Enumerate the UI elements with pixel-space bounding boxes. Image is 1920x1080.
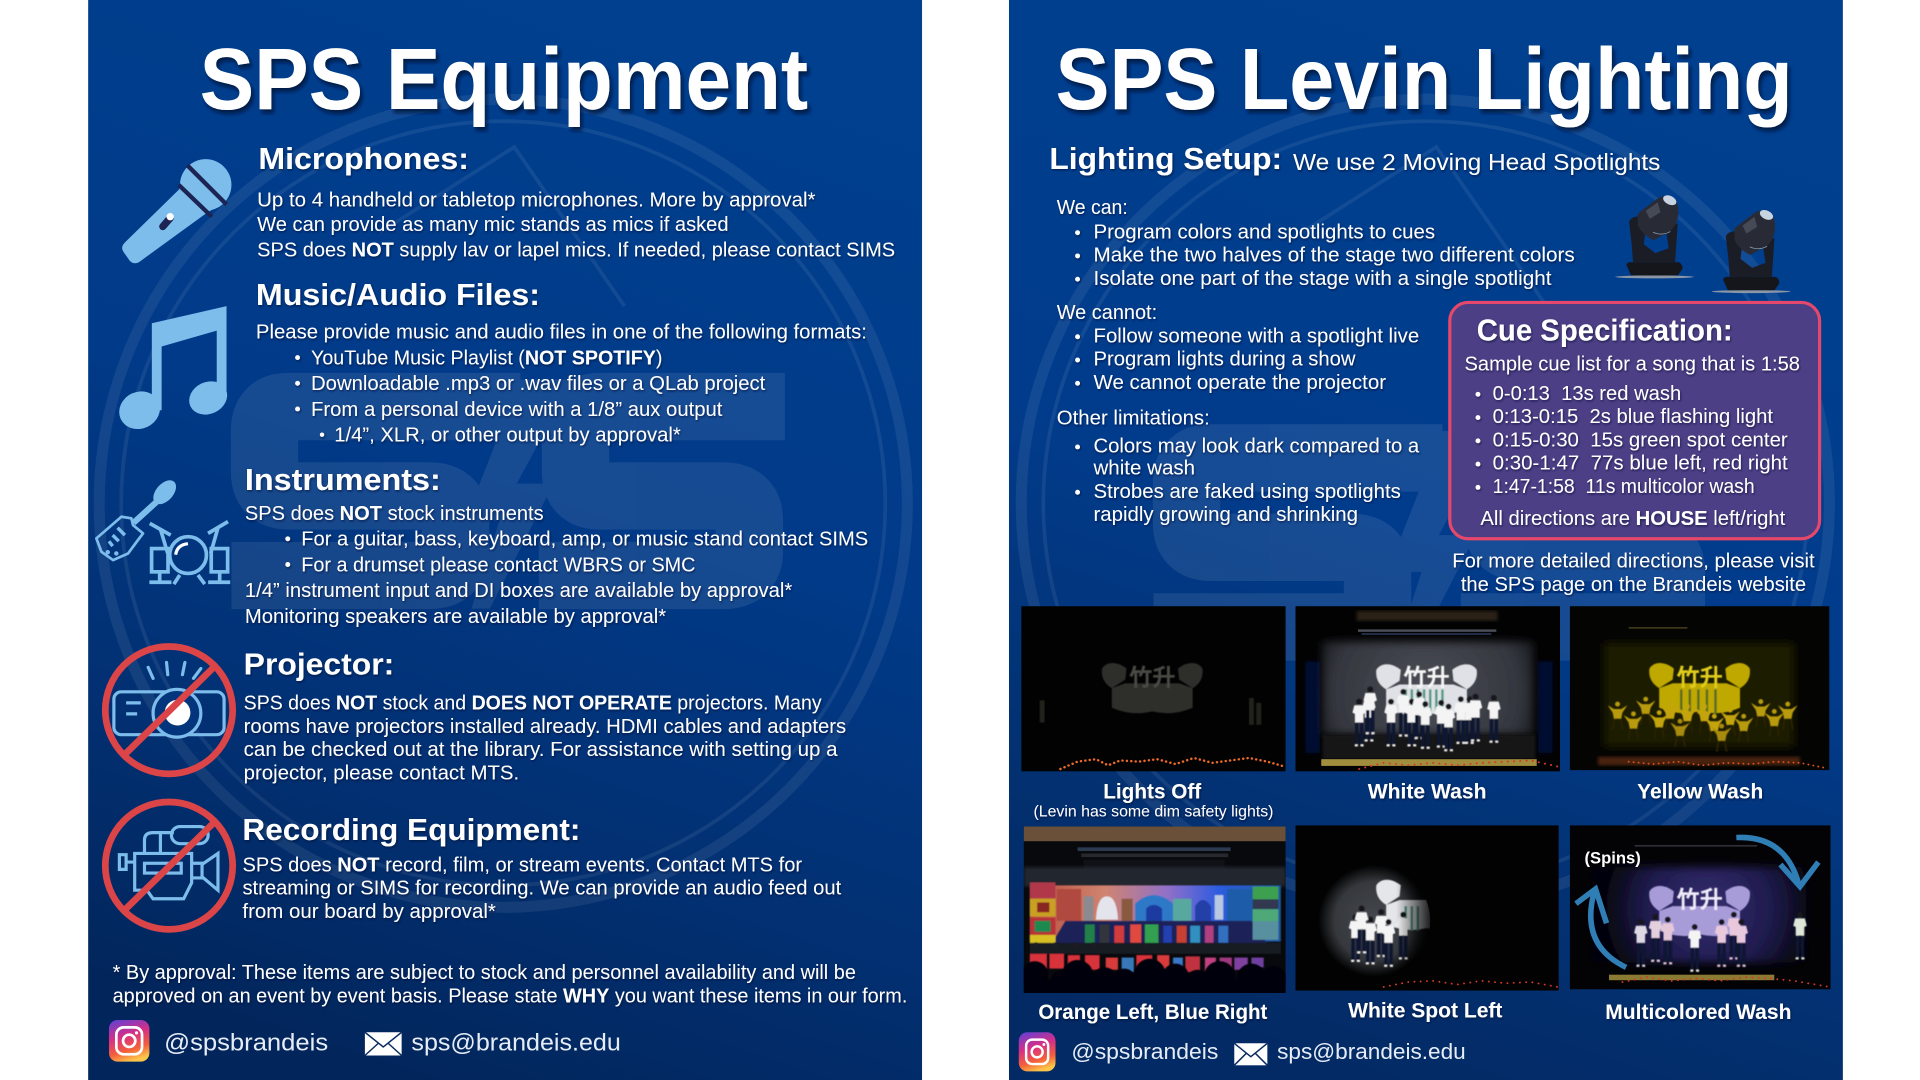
captions: photo labels: White Spot Left xyxy=(1348,999,1502,1023)
text: instagram handle: @spsbrandeis xyxy=(1071,1039,1218,1064)
photo: yellow wash xyxy=(1570,606,1829,770)
icon: music note xyxy=(113,306,233,436)
footnote: by approval xyxy=(113,962,907,1007)
text: more directions note: the SPS page on the Brandeis website xyxy=(1461,574,1806,596)
text: other limitations list: Other limitations: xyxy=(1057,407,1210,429)
text: email: sps@brandeis.edu xyxy=(411,1030,621,1057)
captions: photo labels: (Levin has some dim safety lights) xyxy=(1033,804,1273,821)
photo: orange left, blue right xyxy=(1021,827,1287,994)
text: more directions note xyxy=(1452,551,1815,596)
icon: moving head spotlights xyxy=(1615,193,1790,293)
text: we cannot list xyxy=(1057,302,1419,394)
text: music formats list xyxy=(256,322,867,447)
icon: no projector xyxy=(105,647,233,774)
heading: Music/Audio Files: Music/Audio Files: xyxy=(256,278,540,312)
text: music formats list: Please provide music and audio files in one of the following formats: xyxy=(256,322,867,344)
text: instagram handle: @spsbrandeis xyxy=(164,1030,328,1057)
text: microphones body: Up to 4 handheld or tabletop microphones. More by approval* xyxy=(257,189,816,211)
icon: mail xyxy=(1234,1043,1267,1065)
text: recording body: streaming or SIMS for recording. We can provide an audio feed out xyxy=(242,878,842,900)
text: we can list xyxy=(1057,197,1575,290)
text: recording body: from our board by approval* xyxy=(242,901,496,923)
watermark: SPS logo xyxy=(99,99,907,907)
arrow: clockwise bottom left xyxy=(1576,889,1626,967)
captions: photo labels xyxy=(1033,779,1791,1024)
photo: multicolored wash xyxy=(1570,825,1831,989)
captions: photo labels: White Wash xyxy=(1368,779,1487,803)
section: microphones xyxy=(122,142,895,263)
text: other limitations list: Strobes are faked using spotlights xyxy=(1093,481,1401,503)
text: we cannot list: Program lights during a show xyxy=(1093,349,1356,371)
heading: Instruments: Instruments: xyxy=(245,463,441,497)
arrow: clockwise top right xyxy=(1736,837,1818,887)
text: microphones body: We can provide as many mic stands as mics if asked xyxy=(257,214,729,236)
photo: white spot left xyxy=(1296,825,1559,991)
text: cue list: 0:13-0:15 2s blue flashing light xyxy=(1493,406,1773,428)
captions: photo labels: Orange Left, Blue Right xyxy=(1038,1000,1267,1024)
icon: mail xyxy=(365,1032,402,1056)
heading: Cue Specification: Cue Specification: xyxy=(1477,313,1733,347)
photo: lights off: 竹升 xyxy=(1129,665,1176,691)
heading: Lighting Setup: We use 2 Moving Head Spotlights xyxy=(1293,149,1660,175)
section: instruments xyxy=(96,463,868,628)
section: recording equipment xyxy=(105,802,842,929)
text: instruments body: 1/4” instrument input and DI boxes are available by approval* xyxy=(245,580,792,602)
heading: Lighting Setup xyxy=(1049,142,1660,176)
text: projector body: rooms have projectors installed already. HDMI cables and adapters xyxy=(244,716,846,738)
footnote: by approval: * By approval: These items are subject to stock and personnel availability and will be xyxy=(113,962,856,984)
text: music formats list: Downloadable .mp3 or .wav files or a QLab project xyxy=(311,373,766,395)
icon: instagram xyxy=(109,1020,149,1062)
photo: white wash xyxy=(1296,606,1560,771)
watermark: SPS logo xyxy=(1021,99,1829,907)
text: we cannot list: We cannot operate the projector xyxy=(1093,372,1386,394)
text: music formats list: YouTube Music Playlist (NOT SPOTIFY) xyxy=(311,347,662,369)
photo: multicolored wash: 竹升 xyxy=(1676,886,1723,912)
text: recording body xyxy=(242,854,842,923)
panel: SPS Equipment xyxy=(88,0,922,1080)
text: other limitations list: rapidly growing and shrinking xyxy=(1093,504,1358,526)
text: microphones body xyxy=(257,189,895,262)
photo: lights off xyxy=(1021,606,1286,771)
heading: Lighting Setup: Lighting Setup: xyxy=(1049,142,1282,176)
captions: photo labels: Multicolored Wash xyxy=(1605,1000,1791,1024)
icon: microphone xyxy=(122,159,231,263)
text: cue list: 1:47-1:58 11s multicolor wash xyxy=(1493,476,1755,498)
text: projector body: projector, please contact MTS. xyxy=(244,763,519,785)
heading: Recording Equipment: Recording Equipment: xyxy=(242,813,580,847)
text: instruments body: For a drumset please contact WBRS or SMC xyxy=(301,554,696,576)
section: music and audio files xyxy=(113,278,867,447)
heading: Projector: Projector: xyxy=(244,648,394,682)
footnote: by approval: approved on an event by event basis. Please state WHY you want these items in our form. xyxy=(113,985,907,1007)
text: we can list: We can: xyxy=(1057,197,1128,219)
text: instruments body: SPS does NOT stock instruments xyxy=(245,503,544,525)
text: we cannot list: We cannot: xyxy=(1057,302,1157,324)
text: projector body: can be checked out at the library. For assistance with setting up a xyxy=(244,739,838,761)
text: more directions note: For more detailed directions, please visit xyxy=(1452,551,1815,573)
text: cue list: All directions are HOUSE left/right xyxy=(1480,508,1786,530)
text: cue list: 0:15-0:30 15s green spot center xyxy=(1493,429,1788,451)
icon: no camera xyxy=(105,802,233,929)
text: microphones body: SPS does NOT supply lav or lapel mics. If needed, please contact SIMS xyxy=(257,240,895,262)
icon: instagram xyxy=(1019,1032,1056,1071)
text: other limitations list: Colors may look dark compared to a xyxy=(1093,436,1420,458)
text: other limitations list: white wash xyxy=(1092,458,1195,480)
text: recording body: SPS does NOT record, film, or stream events. Contact MTS for xyxy=(242,854,802,876)
callout: cue specification xyxy=(1450,302,1820,539)
text: music formats list: From a personal device with a 1/8” aux output xyxy=(311,399,723,421)
text: we can list: Program colors and spotlights to cues xyxy=(1093,221,1435,243)
text: email: sps@brandeis.edu xyxy=(1277,1039,1466,1064)
captions: photo labels: Lights Off xyxy=(1103,779,1202,803)
heading: Microphones: Microphones: xyxy=(258,142,469,176)
text: cue list xyxy=(1464,354,1800,530)
text: cue list: 0-0:13 13s red wash xyxy=(1493,383,1681,405)
photo: white wash: 竹升 xyxy=(1403,665,1450,691)
text: projector body xyxy=(244,693,846,785)
title: SPS Equipment: SPS Equipment xyxy=(200,31,808,128)
text: projector body: SPS does NOT stock and DOES NOT OPERATE projectors. Many xyxy=(244,693,822,715)
text: other limitations list xyxy=(1057,407,1420,526)
text: instruments body: Monitoring speakers are available by approval* xyxy=(245,606,666,628)
text: we cannot list: Follow someone with a spotlight live xyxy=(1093,325,1419,347)
label: spins: (Spins) xyxy=(1584,848,1641,867)
text: cue list: Sample cue list for a song that is 1:58 xyxy=(1464,354,1800,376)
contact row xyxy=(1019,1032,1466,1071)
text: cue list: 0:30-1:47 77s blue left, red right xyxy=(1493,453,1788,475)
title: SPS Levin Lighting: SPS Levin Lighting xyxy=(1056,31,1793,128)
icon: guitar and drums xyxy=(96,476,230,584)
panel: SPS Levin Lighting xyxy=(1009,0,1843,1080)
text: instruments body: For a guitar, bass, keyboard, amp, or music stand contact SIMS xyxy=(301,529,868,551)
photo: yellow wash: 竹升 xyxy=(1676,665,1723,691)
section: projector xyxy=(105,647,846,785)
text: we can list: Make the two halves of the stage two different colors xyxy=(1093,245,1575,267)
captions: photo labels: Yellow Wash xyxy=(1637,779,1763,803)
text: music formats list: 1/4”, XLR, or other output by approval* xyxy=(334,425,681,447)
contact row xyxy=(109,1020,621,1062)
text: we can list: Isolate one part of the stage with a single spotlight xyxy=(1093,268,1552,290)
text: instruments body xyxy=(245,503,868,628)
